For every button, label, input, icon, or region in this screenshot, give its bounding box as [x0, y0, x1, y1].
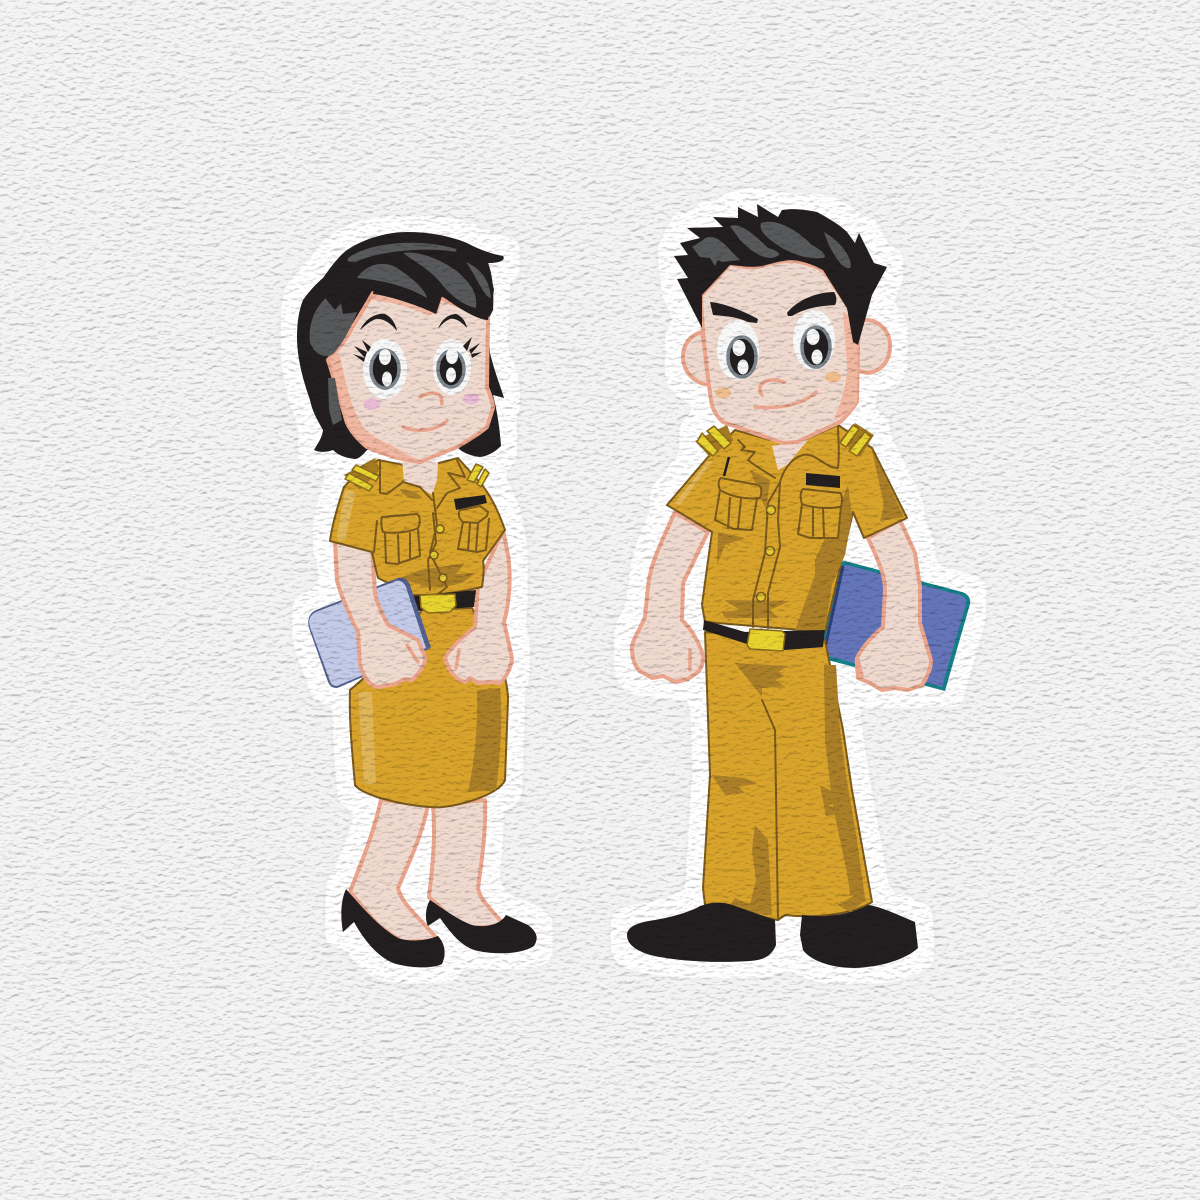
man: nose and mouth	[755, 380, 816, 407]
figure: woman in uniform	[297, 232, 537, 967]
woman: shirt buttons	[430, 525, 447, 582]
man: right pocket	[798, 489, 842, 538]
man: hair highlights	[692, 222, 851, 268]
man: shirt	[667, 423, 907, 632]
woman: cheeks	[364, 394, 480, 410]
man: right ear	[855, 320, 890, 373]
figure: man in uniform	[627, 204, 970, 968]
woman: forehead shading	[372, 293, 436, 316]
man: pen	[724, 457, 729, 476]
woman: left epaulette	[344, 458, 380, 491]
man: arms and hands	[632, 512, 931, 690]
man: left ear	[683, 332, 712, 385]
woman: name tag	[454, 495, 487, 510]
woman: left eye	[353, 339, 407, 399]
woman: left shoe	[341, 889, 445, 967]
man: left eye	[717, 320, 759, 380]
woman: face	[328, 293, 493, 462]
woman: folder	[308, 578, 431, 688]
woman: eyebrows	[360, 314, 467, 331]
man: eyebrows	[710, 292, 836, 323]
man: name tag	[806, 473, 840, 488]
man: folder	[820, 561, 970, 691]
man: left shoe	[627, 903, 776, 962]
woman: hair back	[297, 232, 504, 459]
woman: skirt	[350, 608, 508, 807]
man: right shoe	[800, 905, 918, 968]
woman: right pocket	[458, 506, 489, 552]
man: shirt buttons	[756, 506, 776, 602]
woman: right eye	[433, 337, 482, 395]
woman: right shoe	[426, 900, 537, 953]
man: face	[701, 261, 858, 443]
woman: right epaulette	[467, 464, 489, 487]
man: cheeks	[715, 372, 841, 398]
man: left epaulette	[695, 425, 733, 457]
woman: nose and mouth	[403, 393, 447, 430]
man: face shading	[834, 312, 858, 419]
woman: upper arms	[335, 530, 512, 687]
woman: belt	[413, 590, 476, 613]
woman: hair highlights	[310, 243, 494, 425]
woman: forearm over folder	[334, 572, 428, 689]
man: left pocket	[715, 478, 761, 530]
woman: legs	[350, 800, 505, 942]
man: right eye	[793, 310, 835, 370]
man: trousers	[703, 632, 872, 920]
man: hair	[674, 204, 887, 345]
man: right epaulette	[840, 423, 874, 457]
woman: left pocket	[381, 514, 420, 564]
woman: face shading	[330, 354, 420, 460]
woman: shirt	[330, 458, 505, 595]
man: belt	[703, 620, 825, 651]
